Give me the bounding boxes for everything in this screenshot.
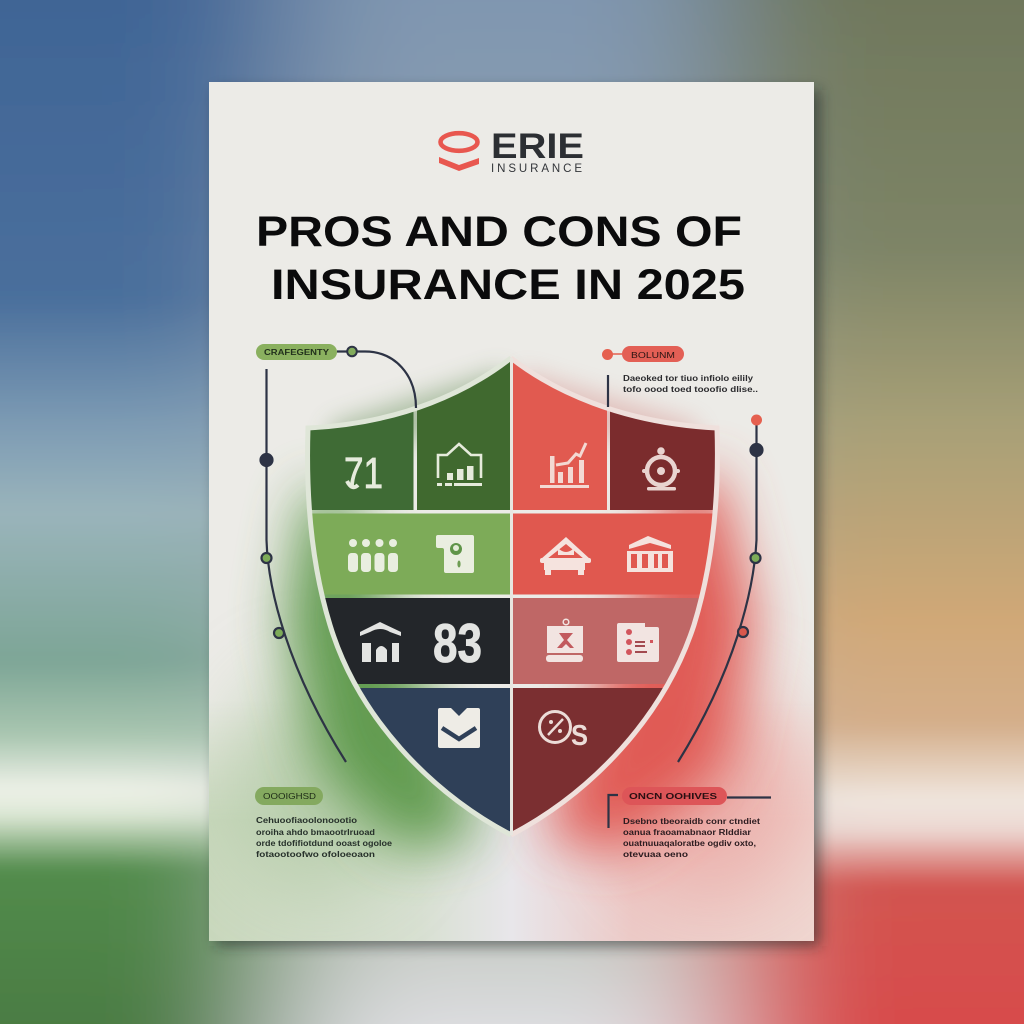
pill label: CRAFEGENTY [264,348,330,357]
title [256,208,745,309]
shield centre divider [510,358,513,835]
text block: fotaootoofwo ofoloeoaon [256,850,375,859]
icon: house chart [437,444,482,486]
glow: red along shield [545,470,755,850]
text block: Dsebno tbeoraidb conr ctndiet [623,817,760,826]
shield outline right [511,358,717,835]
text block: tofo oood toed tooofio dlise.. [623,385,758,394]
vertical rule [607,375,609,407]
callout: top right [602,346,758,407]
text block [256,816,393,859]
text block: Daeoked tor tiuo infiolo eilily [623,374,754,383]
glow: bottom paper tint [209,726,814,941]
paper shadow [216,90,820,946]
text block: orde tdofifiotdund ooast ogoloe [256,839,393,848]
glow: pale red lower right [610,680,810,900]
icon: board with hourglass [546,619,583,662]
shield [300,350,723,838]
pill label: BOLUNM [631,350,675,360]
callout: top left [256,344,416,408]
glow: green top shield [330,368,505,450]
connector node [347,347,357,356]
poster panel [209,82,814,941]
icon: bar chart rising [540,443,589,488]
logo wordmark: ERIE [491,127,584,166]
node: green [750,553,760,563]
glow: green along shield [285,490,480,850]
text block: Cehuoofiaoolonoootio [256,816,357,825]
icon: temple [360,622,401,662]
right timeline [678,414,762,762]
text block [623,817,760,859]
icon: percent circle with S: S [571,720,588,752]
node: green upper [262,553,272,563]
glow: pale green lower left [230,670,410,890]
icon: card with badge [436,535,474,573]
title: INSURANCE IN 2025 [271,261,745,309]
text block: oanua fraoamabnaor Rlddiar [623,828,751,837]
title: PROS AND CONS OF [256,208,742,256]
logo subtext: INSURANCE [491,163,582,175]
left timeline [260,369,346,762]
shield outline left [308,358,511,835]
icon: checklist folder [617,623,659,662]
icon: logo ring and chevron [439,133,479,171]
node: green lower [274,628,284,638]
dot [602,349,613,360]
text block: ouatnuuaqaloratbe ogdiv oxto, [623,839,756,848]
node: red top [751,414,762,426]
node: dark [260,454,272,466]
bracket [608,795,618,828]
pill [622,346,684,362]
node: dark [750,444,762,456]
icon: target gauge [642,447,680,490]
node: red lower [738,627,748,637]
callout: bottom left [255,787,393,859]
icon: people [348,539,398,572]
pill label: ONCN OOHIVES [629,791,717,801]
text block: otevuaa oeno [623,850,688,859]
text block: oroiha ahdo bmaootrlruoad [256,828,375,837]
pill [256,344,337,360]
connector [337,352,416,408]
pill [622,787,727,805]
icon: percent circle with S [540,712,588,752]
icon: number 71: 71 [344,449,383,498]
icon: house on table [540,537,591,575]
icon: museum [627,536,673,572]
pill label: OOOIGHSD [263,791,316,801]
text block [623,374,758,394]
rule [727,796,771,799]
logo [439,127,584,175]
shield cells [300,350,723,838]
glow: red top shield [520,370,700,450]
icon: envelope badge [438,708,480,748]
number 83: 83 [433,612,482,674]
callout: bottom right [608,787,771,859]
pill [255,787,323,805]
